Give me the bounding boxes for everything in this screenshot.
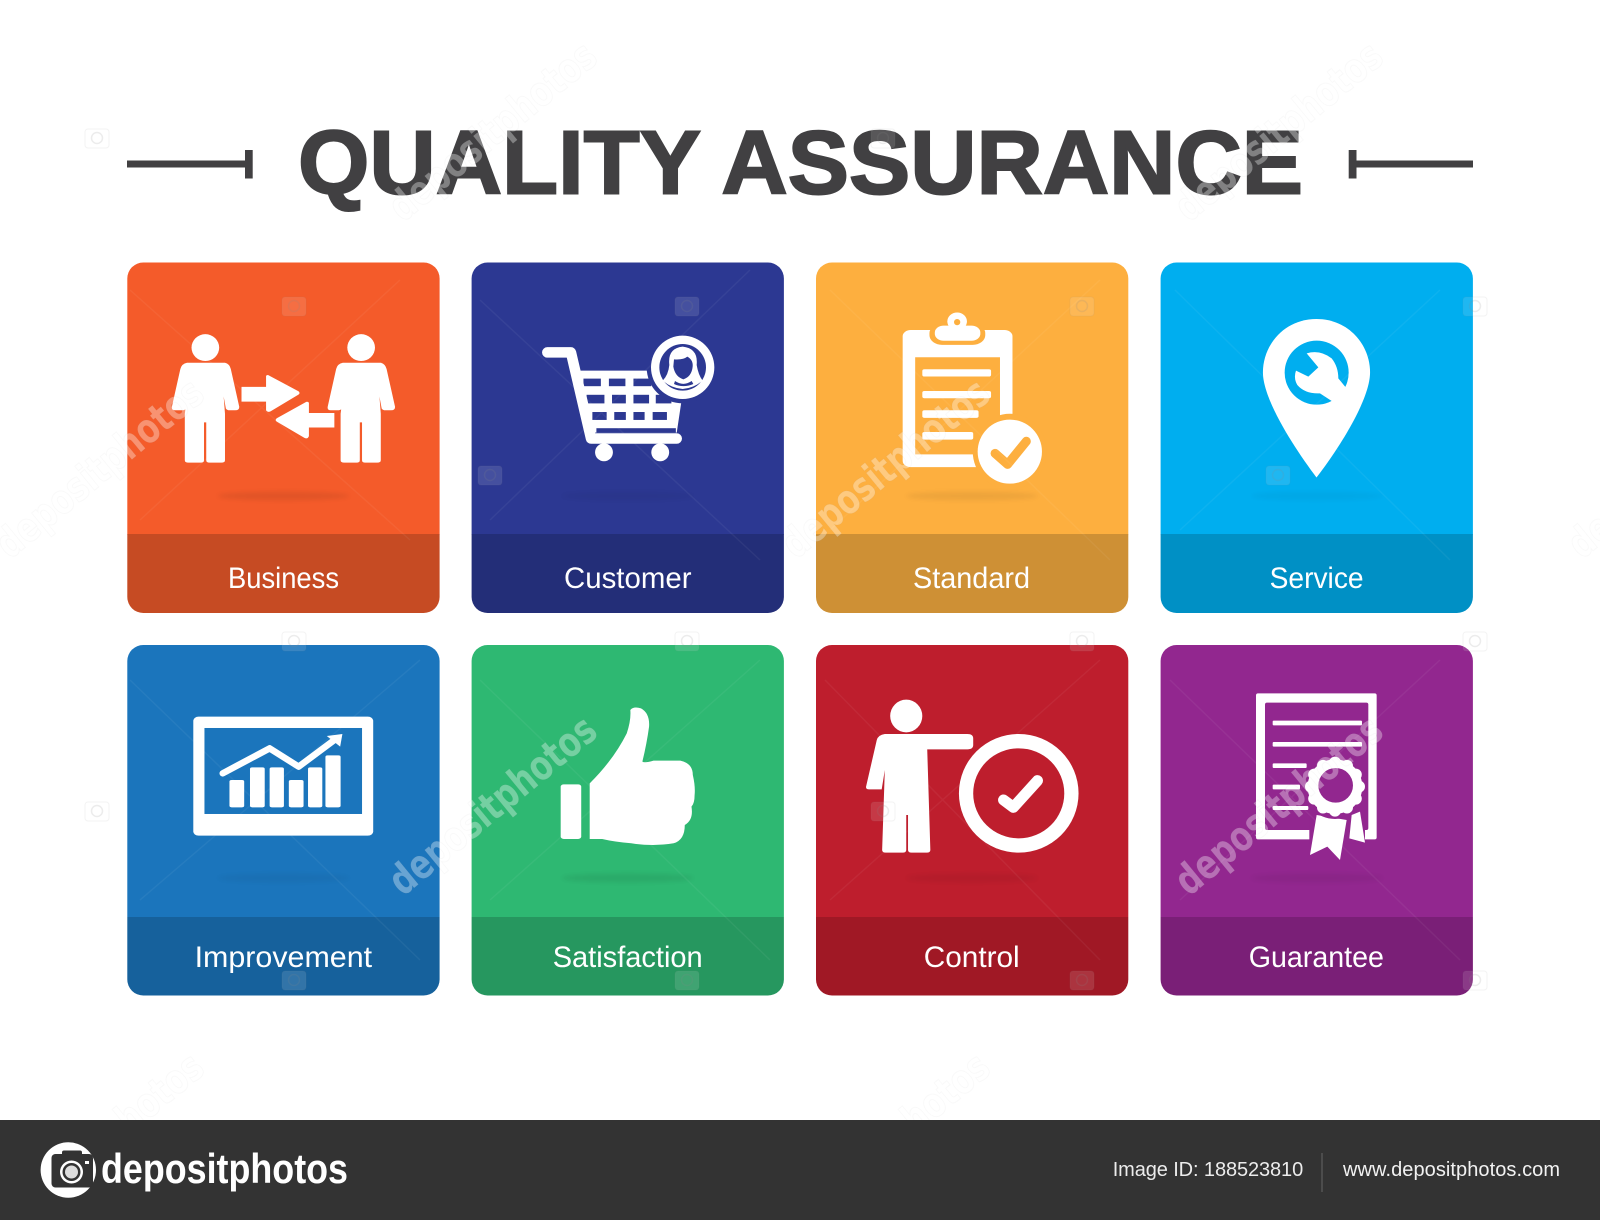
icon: shopping cart with customer (547, 331, 719, 461)
icon shadow (562, 492, 694, 500)
left title bracket (127, 150, 253, 178)
icon shadow (218, 874, 350, 882)
label band (472, 534, 784, 613)
panel: Customer (472, 262, 784, 613)
image id: Image ID: 188523810 (1113, 1159, 1303, 1181)
panel: Satisfaction (472, 645, 784, 996)
label: Standard (913, 562, 1030, 595)
card background (472, 645, 784, 917)
card background (1161, 262, 1473, 534)
card background (816, 262, 1128, 534)
icon shadow (906, 874, 1038, 882)
icon: growth chart on screen (193, 717, 373, 836)
card background (472, 262, 784, 534)
panel: Business (127, 262, 440, 613)
footer divider (1322, 1153, 1323, 1192)
right title bracket (1349, 150, 1473, 178)
icon shadow (218, 492, 350, 500)
icon: thumbs up (561, 707, 695, 845)
label: Business (228, 562, 339, 595)
icon shadow (1251, 874, 1383, 882)
label band (816, 534, 1128, 613)
watermark layer: depositphotos (379, 705, 606, 905)
label: Control (924, 941, 1020, 974)
logo wordmark: depositphotos (101, 1145, 348, 1192)
panel: Improvement (127, 645, 440, 996)
icon shadow (1251, 492, 1383, 500)
label: Satisfaction (553, 941, 703, 974)
card background (127, 645, 440, 917)
label: Service (1270, 562, 1364, 595)
panel: Guarantee (1161, 645, 1473, 996)
panel: Standard (816, 262, 1128, 613)
label band (816, 917, 1128, 996)
label band (1161, 917, 1473, 996)
panel: Control (816, 645, 1128, 996)
label band (127, 917, 440, 996)
icon shadow (906, 492, 1038, 500)
website url: www.depositphotos.com (1342, 1159, 1560, 1181)
label: Guarantee (1249, 941, 1384, 974)
label band (127, 534, 440, 613)
icon: camera logo (41, 1142, 96, 1198)
icon: two people exchanging (172, 334, 395, 463)
icon: clipboard with check (903, 312, 1047, 490)
label: Improvement (195, 941, 373, 974)
panel: Service (1161, 262, 1473, 613)
watermark layer: depositphotos (1165, 705, 1392, 905)
footer bar (0, 1120, 1600, 1220)
label: Customer (564, 562, 692, 595)
title: QUALITY ASSURANCE (298, 114, 1303, 214)
label band (1161, 534, 1473, 613)
icon shadow (562, 874, 694, 882)
card background (127, 262, 440, 534)
icon: person pointing at check mark (866, 700, 1079, 853)
card background (1161, 645, 1473, 917)
watermark layer: depositphotos (772, 368, 999, 568)
icon: certificate with ribbon seal (1256, 693, 1377, 860)
label band (472, 917, 784, 996)
card background (816, 645, 1128, 917)
icon: location pin with wrench (1263, 319, 1370, 477)
